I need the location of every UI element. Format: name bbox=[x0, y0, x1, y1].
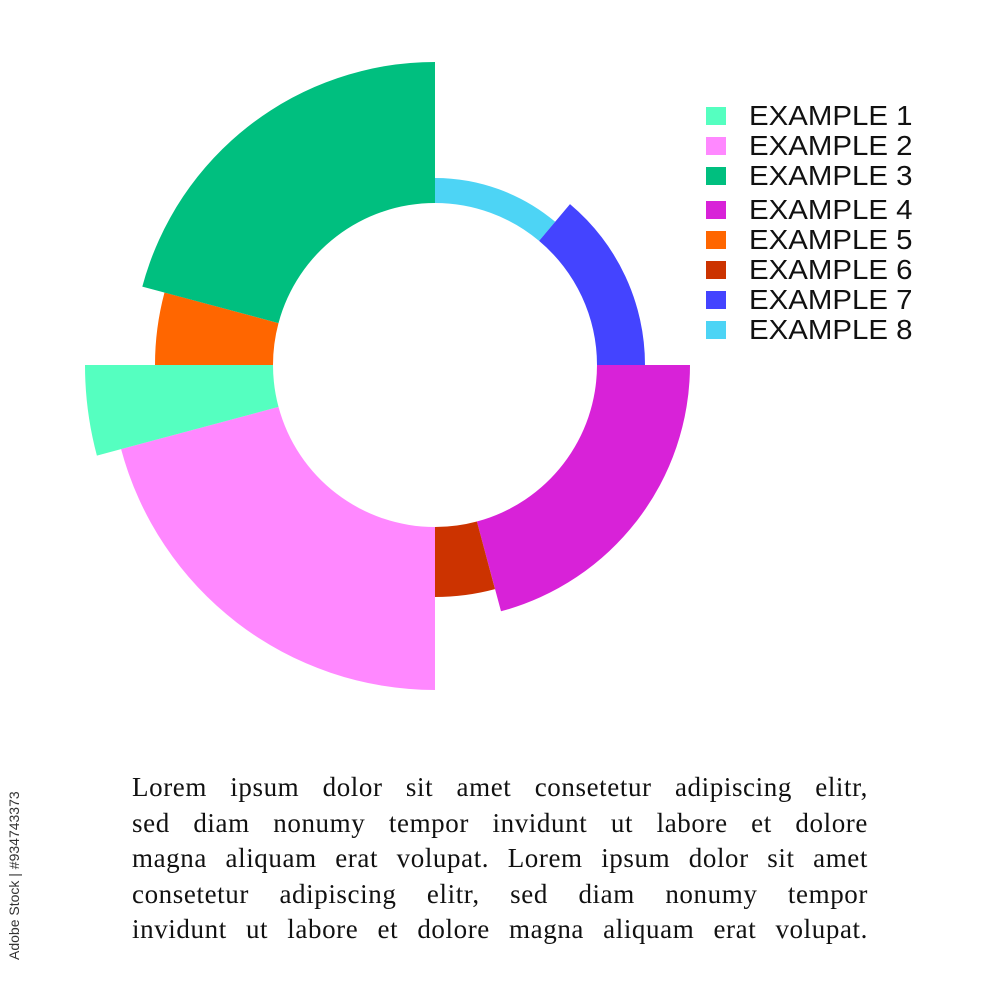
text: EXAMPLE 1 bbox=[749, 100, 913, 131]
legend bbox=[706, 100, 913, 345]
text block: description bbox=[132, 772, 868, 944]
text: EXAMPLE 4 bbox=[749, 194, 913, 225]
segment: example 5 bbox=[155, 292, 278, 365]
segment: example 7 bbox=[539, 204, 645, 365]
text: EXAMPLE 5 bbox=[749, 224, 913, 255]
segment: example 6 bbox=[435, 522, 495, 597]
text: EXAMPLE 7 bbox=[749, 284, 913, 315]
text block: description: invidunt ut labore et dolore magna aliquam erat volupat. bbox=[132, 914, 868, 944]
text block: description: sed diam nonumy tempor invidunt ut labore et dolore bbox=[132, 808, 868, 838]
text: EXAMPLE 3 bbox=[749, 160, 913, 191]
watermark text: Adobe Stock | #934743373 bbox=[6, 791, 22, 960]
text: EXAMPLE 6 bbox=[749, 254, 913, 285]
text: EXAMPLE 8 bbox=[749, 314, 913, 345]
segment: example 4 bbox=[477, 365, 690, 611]
segment: example 3 bbox=[142, 62, 435, 323]
segment: example 8 bbox=[435, 178, 555, 241]
segment: example 1 bbox=[85, 365, 278, 456]
segment: example 2 bbox=[121, 407, 435, 690]
text block: description: consetetur adipiscing elitr, sed diam nonumy tempor bbox=[132, 878, 868, 908]
text block: description: Lorem ipsum dolor sit amet consetetur adipiscing elitr, bbox=[132, 772, 868, 802]
text: EXAMPLE 2 bbox=[749, 130, 913, 161]
text block: description: magna aliquam erat volupat. Lorem ipsum dolor sit amet bbox=[132, 843, 868, 873]
